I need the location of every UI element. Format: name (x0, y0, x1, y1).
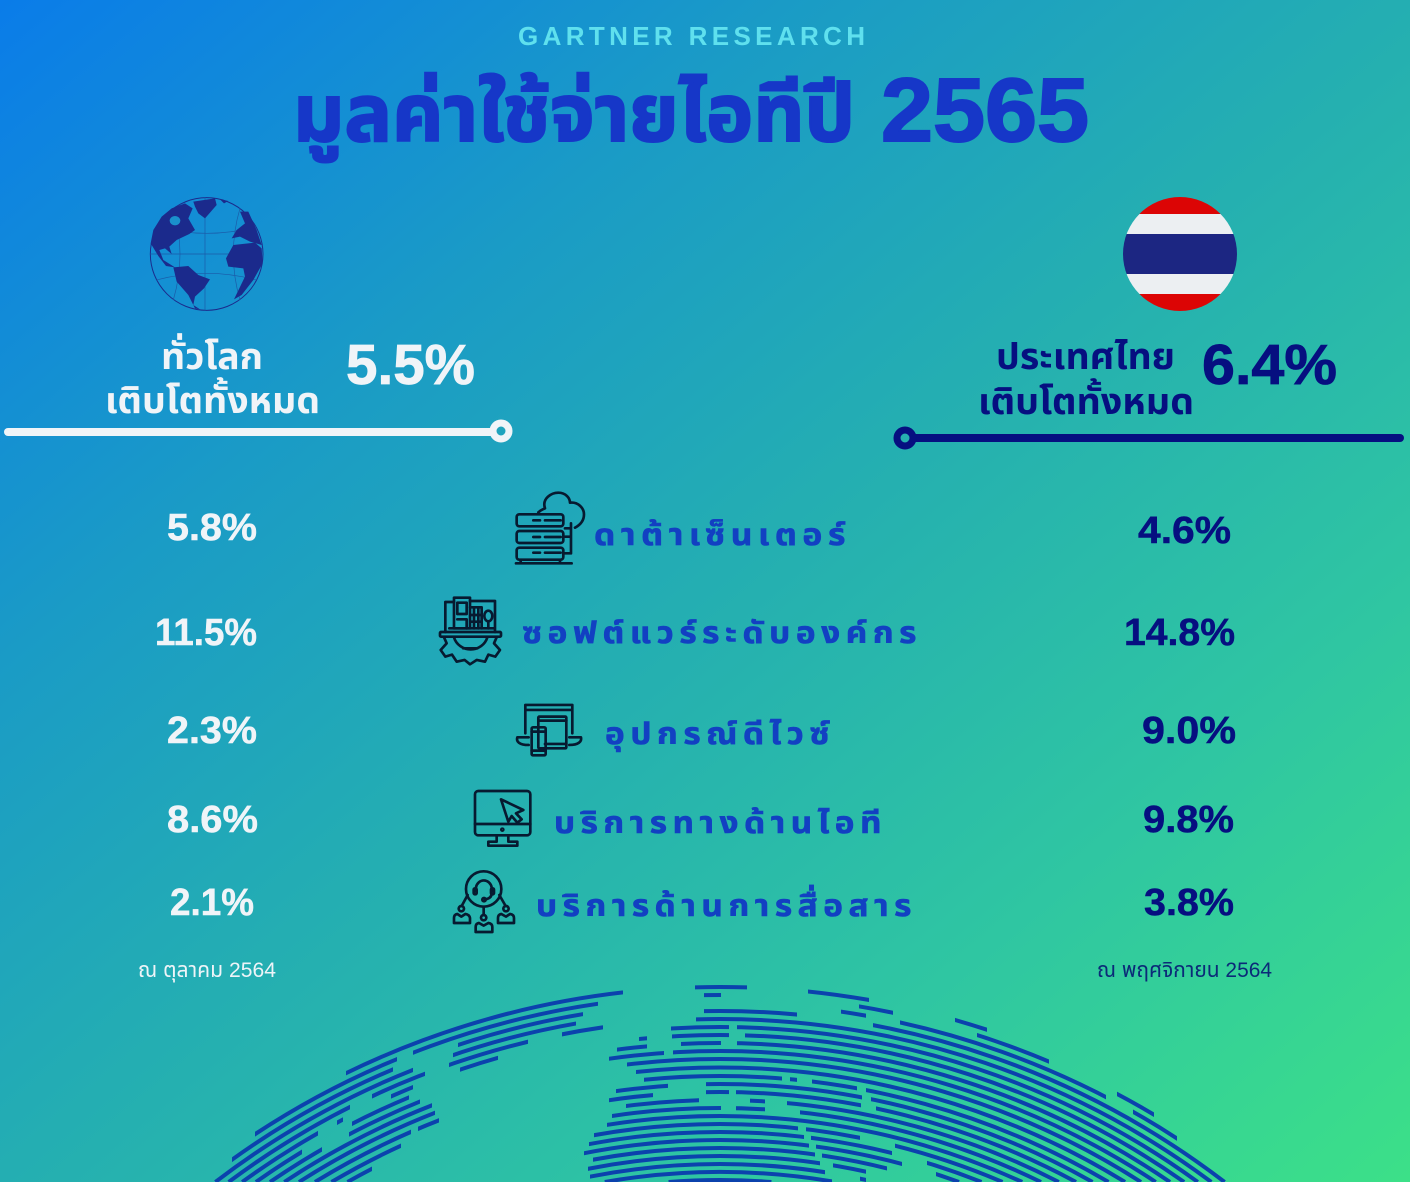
column: worldwide values (155, 507, 258, 924)
column: category labels (522, 518, 922, 923)
column: category labels: บริการด้านการสื่อสาร (536, 884, 917, 923)
decorative globe: striped arcs (177, 987, 1263, 1182)
column: category labels: อุปกรณ์ดีไวซ์ (605, 718, 835, 752)
value: Thailand total: 6.4% (1202, 333, 1337, 397)
value: worldwide total: 5.5% (346, 333, 475, 397)
label: total growth: เติบโตทั้งหมด (105, 376, 320, 421)
icon: data center (516, 493, 584, 563)
label: Thailand: ประเทศไทย (996, 336, 1175, 377)
column: worldwide values: 11.5% (155, 612, 257, 654)
title: 2565 (881, 61, 1089, 161)
column: category labels: ซอฟต์แวร์ระดับองค์กร (522, 617, 922, 650)
title (293, 61, 1089, 162)
footnote: worldwide date: ณ ตุลาคม 2564 (138, 959, 276, 983)
icon: Thai flag (1120, 195, 1240, 314)
label: total growth: เติบโตทั้งหมด (978, 377, 1194, 422)
panel: worldwide total (8, 332, 509, 439)
column: worldwide values: 2.3% (167, 710, 257, 752)
column: category labels: ดาต้าเซ็นเตอร์ (594, 518, 851, 552)
divider line: Thailand (897, 430, 1400, 446)
column: category labels: บริการทางด้านไอที (554, 807, 887, 840)
icon: globe (150, 198, 263, 310)
column: Thailand values: 4.6% (1138, 510, 1231, 552)
column: worldwide values: 8.6% (167, 799, 258, 841)
icon: IT services monitor (475, 791, 530, 846)
column: Thailand values: 9.0% (1142, 710, 1236, 752)
column: worldwide values: 2.1% (170, 882, 254, 924)
footnote: Thailand date: ณ พฤศจิกายน 2564 (1097, 959, 1272, 982)
column: Thailand values: 3.8% (1144, 882, 1234, 924)
eyebrow: Gartner Research: GARTNER RESEARCH (518, 21, 865, 51)
icon: enterprise software (440, 598, 501, 664)
icon: communication services (454, 871, 514, 932)
divider line: worldwide (8, 423, 509, 439)
column: Thailand values: 9.8% (1143, 799, 1234, 841)
panel: Thailand total (897, 333, 1400, 446)
icon: devices (517, 705, 581, 755)
column: Thailand values (1124, 510, 1236, 924)
column: Thailand values: 14.8% (1124, 612, 1235, 654)
title: มูลค่าใช้จ่ายไอทีปี (293, 69, 855, 162)
label: worldwide: ทั่วโลก (161, 332, 263, 377)
column: worldwide values: 5.8% (167, 507, 257, 549)
